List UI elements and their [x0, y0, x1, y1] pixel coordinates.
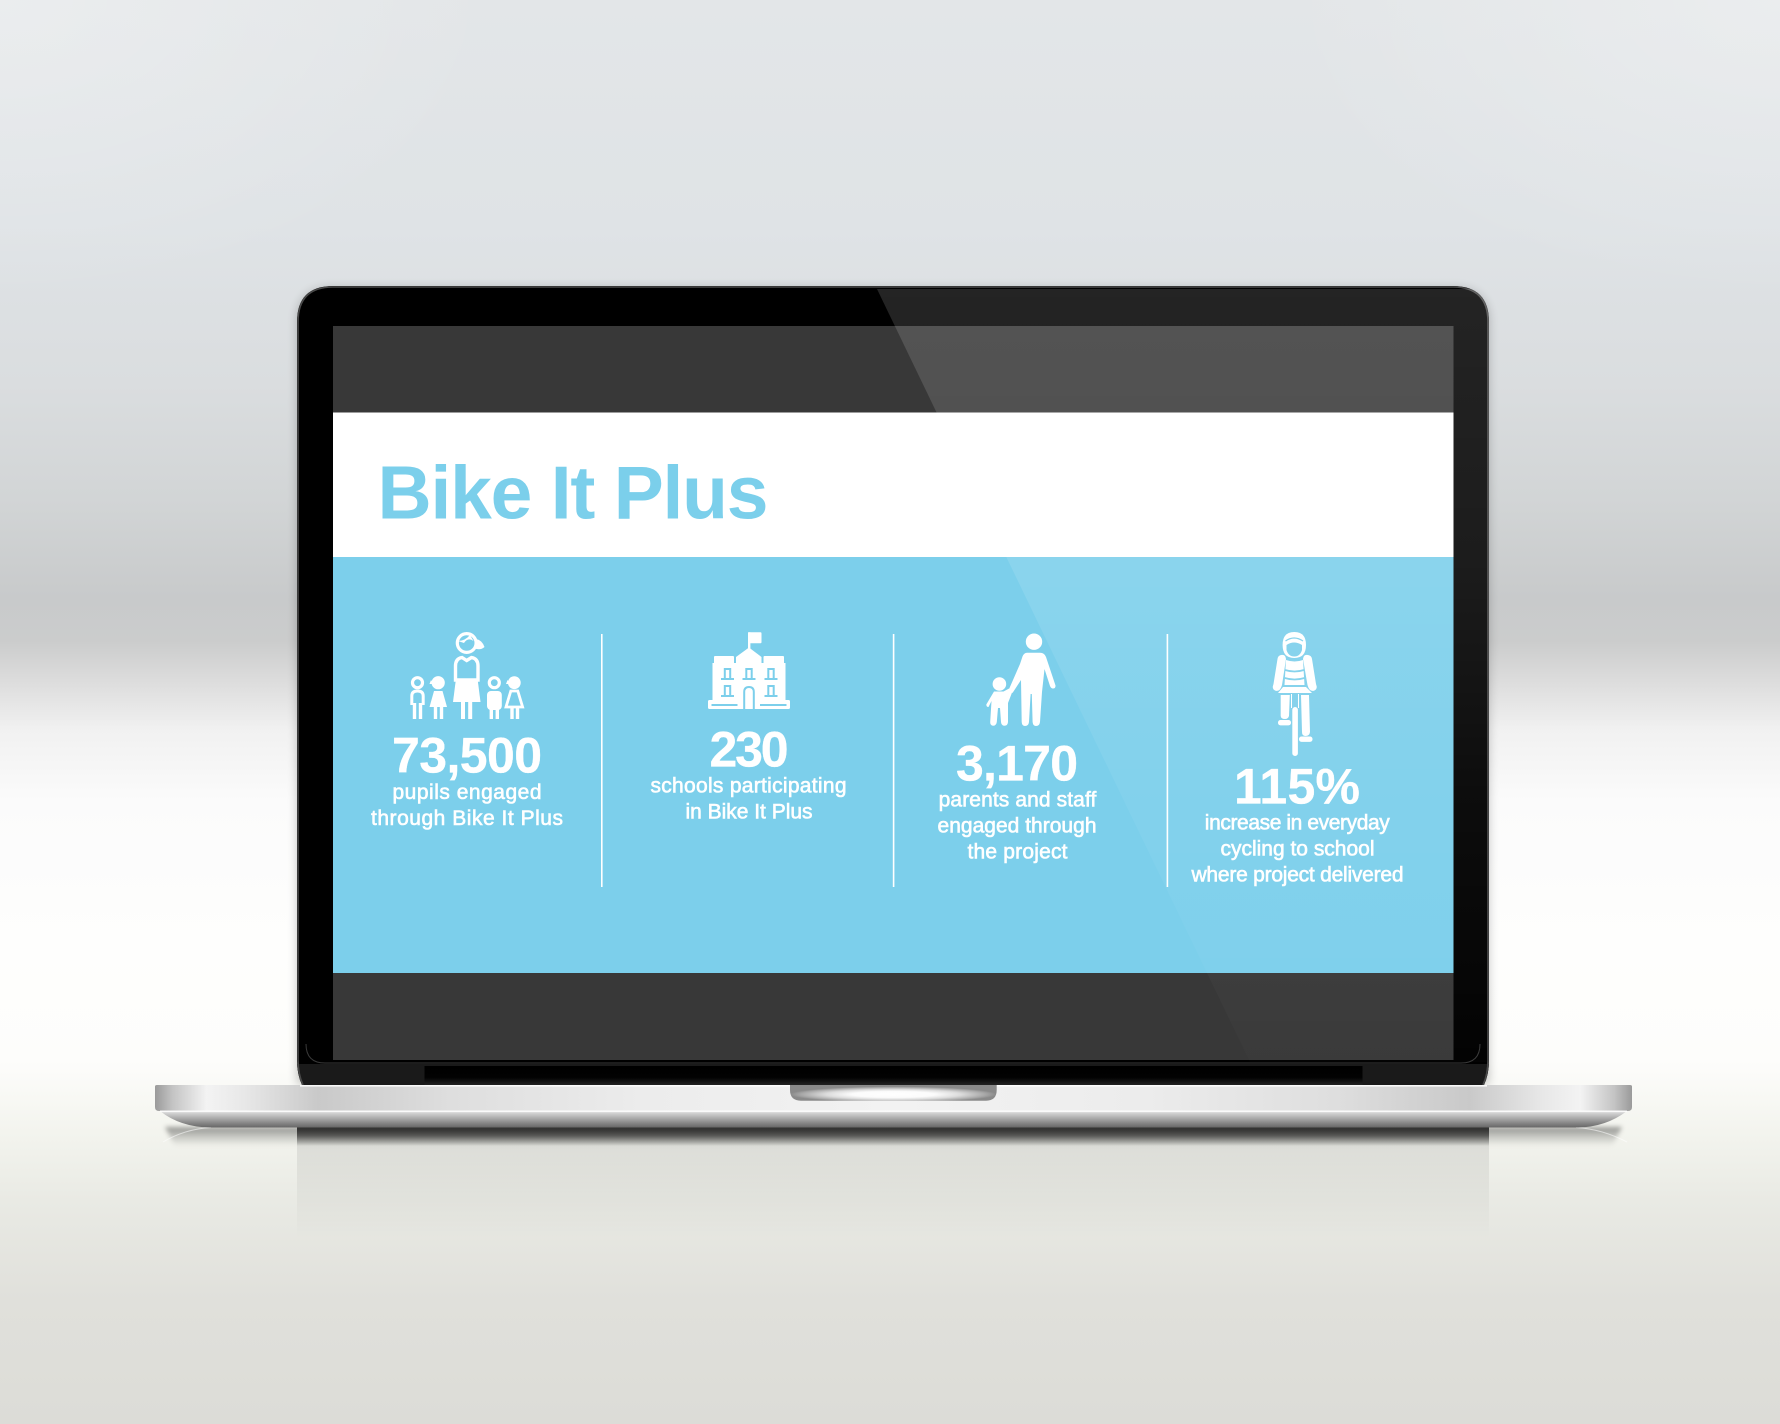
panel: dark screen band bottom: [333, 973, 1454, 1060]
icon: parent holding child's hand: [986, 634, 1056, 726]
heading: Bike It Plus: Bike It Plus: [378, 450, 768, 534]
panel: blue stats band: [333, 557, 1454, 973]
reflection of laptop lid on the surface: [297, 1127, 1489, 1239]
stat: 230: 230: [710, 722, 788, 778]
divider 2: [893, 634, 894, 887]
text: pupils engaged through Bike It Plus: [371, 781, 563, 830]
panel: white title band: [333, 412, 1454, 557]
text: schools participating in Bike It Plus: schools participating: [650, 774, 846, 798]
highlight crescents at base corners: [163, 1128, 1627, 1142]
icon: teacher with four pupils: [412, 634, 523, 719]
icon: school building: [708, 632, 790, 709]
shadow under base: [165, 1127, 1622, 1146]
text: increase in everyday cycling to school where project delivered: cycling to school: [1220, 837, 1374, 860]
panel: dark screen band top: [333, 326, 1454, 412]
base front edge: [155, 1085, 1632, 1111]
text: parents and staff engaged through the project: engaged through: [938, 814, 1096, 837]
text: schools participating in Bike It Plus: [650, 774, 846, 823]
text: pupils engaged through Bike It Plus: pupils engaged: [392, 781, 542, 804]
text: increase in everyday cycling to school where project delivered: [1190, 811, 1404, 886]
laptop base: [155, 1085, 1632, 1146]
divider 3: [1167, 634, 1168, 887]
stat: 115%: 115%: [1234, 758, 1360, 814]
text: parents and staff engaged through the project: [938, 788, 1097, 863]
text: parents and staff engaged through the project: the project: [968, 840, 1068, 863]
laptop lid with screen: [297, 286, 1489, 1085]
stat: 3,170: 3,170: [956, 736, 1078, 792]
icon: cyclist seen from the front: [1273, 632, 1317, 756]
screen glare: [877, 289, 1489, 913]
divider 1: [601, 634, 603, 887]
hinge notch: [790, 1085, 997, 1101]
text: schools participating in Bike It Plus: in Bike It Plus: [686, 800, 812, 823]
text: increase in everyday cycling to school where project delivered: increase in everyday: [1205, 811, 1390, 834]
text: parents and staff engaged through the project: parents and staff: [939, 788, 1097, 811]
stat: 73,500: 73,500: [392, 728, 542, 784]
base underside: [160, 1111, 1627, 1128]
text: increase in everyday cycling to school where project delivered: where project delivered: [1190, 863, 1404, 886]
text: pupils engaged through Bike It Plus: through Bike It Plus: [371, 807, 563, 830]
